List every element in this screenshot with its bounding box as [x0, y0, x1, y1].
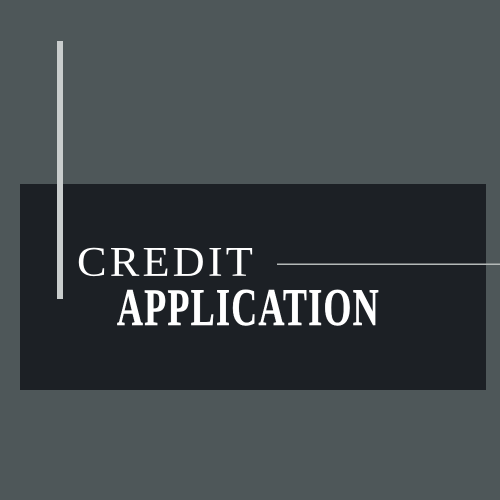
title: CREDIT: CREDIT: [77, 240, 256, 286]
vertical accent bar: [57, 41, 63, 299]
panel: dark title band: [20, 184, 486, 390]
title: APPLICATION: APPLICATION: [117, 279, 380, 337]
horizontal accent line: [277, 264, 500, 265]
